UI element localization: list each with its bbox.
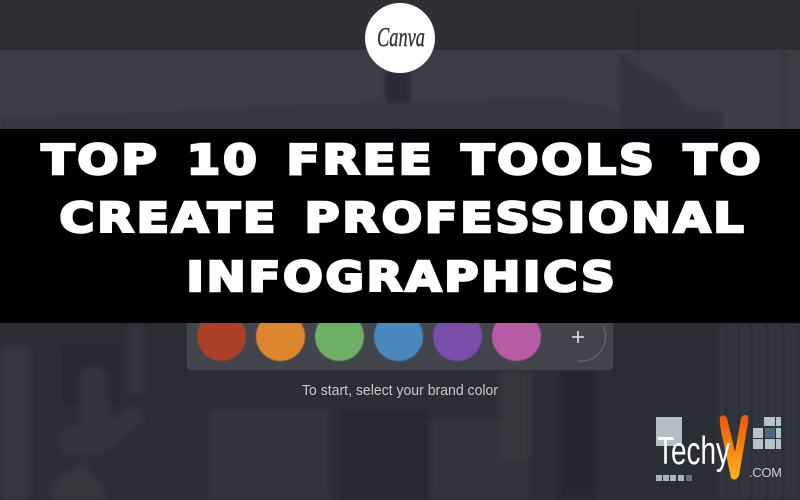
title text: INFOGRAPHICS [186, 253, 618, 301]
colour swatches [197, 312, 541, 361]
logo squares left [656, 417, 682, 446]
title text: TOP 10 FREE TOOLS TO [42, 136, 764, 184]
orange V [720, 415, 748, 480]
add colour button [572, 326, 605, 361]
TechyV watermark logo [656, 415, 782, 481]
title text [42, 136, 764, 301]
Canva logo circle [365, 3, 435, 73]
Canva logo circle: Canva [377, 22, 425, 52]
dot com: .COM [749, 465, 782, 480]
instruction caption: To start, select your brand color [302, 383, 498, 399]
Techy wordmark: Techy [657, 430, 730, 473]
logo small squares [656, 475, 692, 481]
title banner [0, 129, 800, 323]
colour picker panel [187, 300, 613, 370]
logo squares right [753, 417, 781, 449]
title text: CREATE PROFESSIONAL [60, 194, 746, 242]
